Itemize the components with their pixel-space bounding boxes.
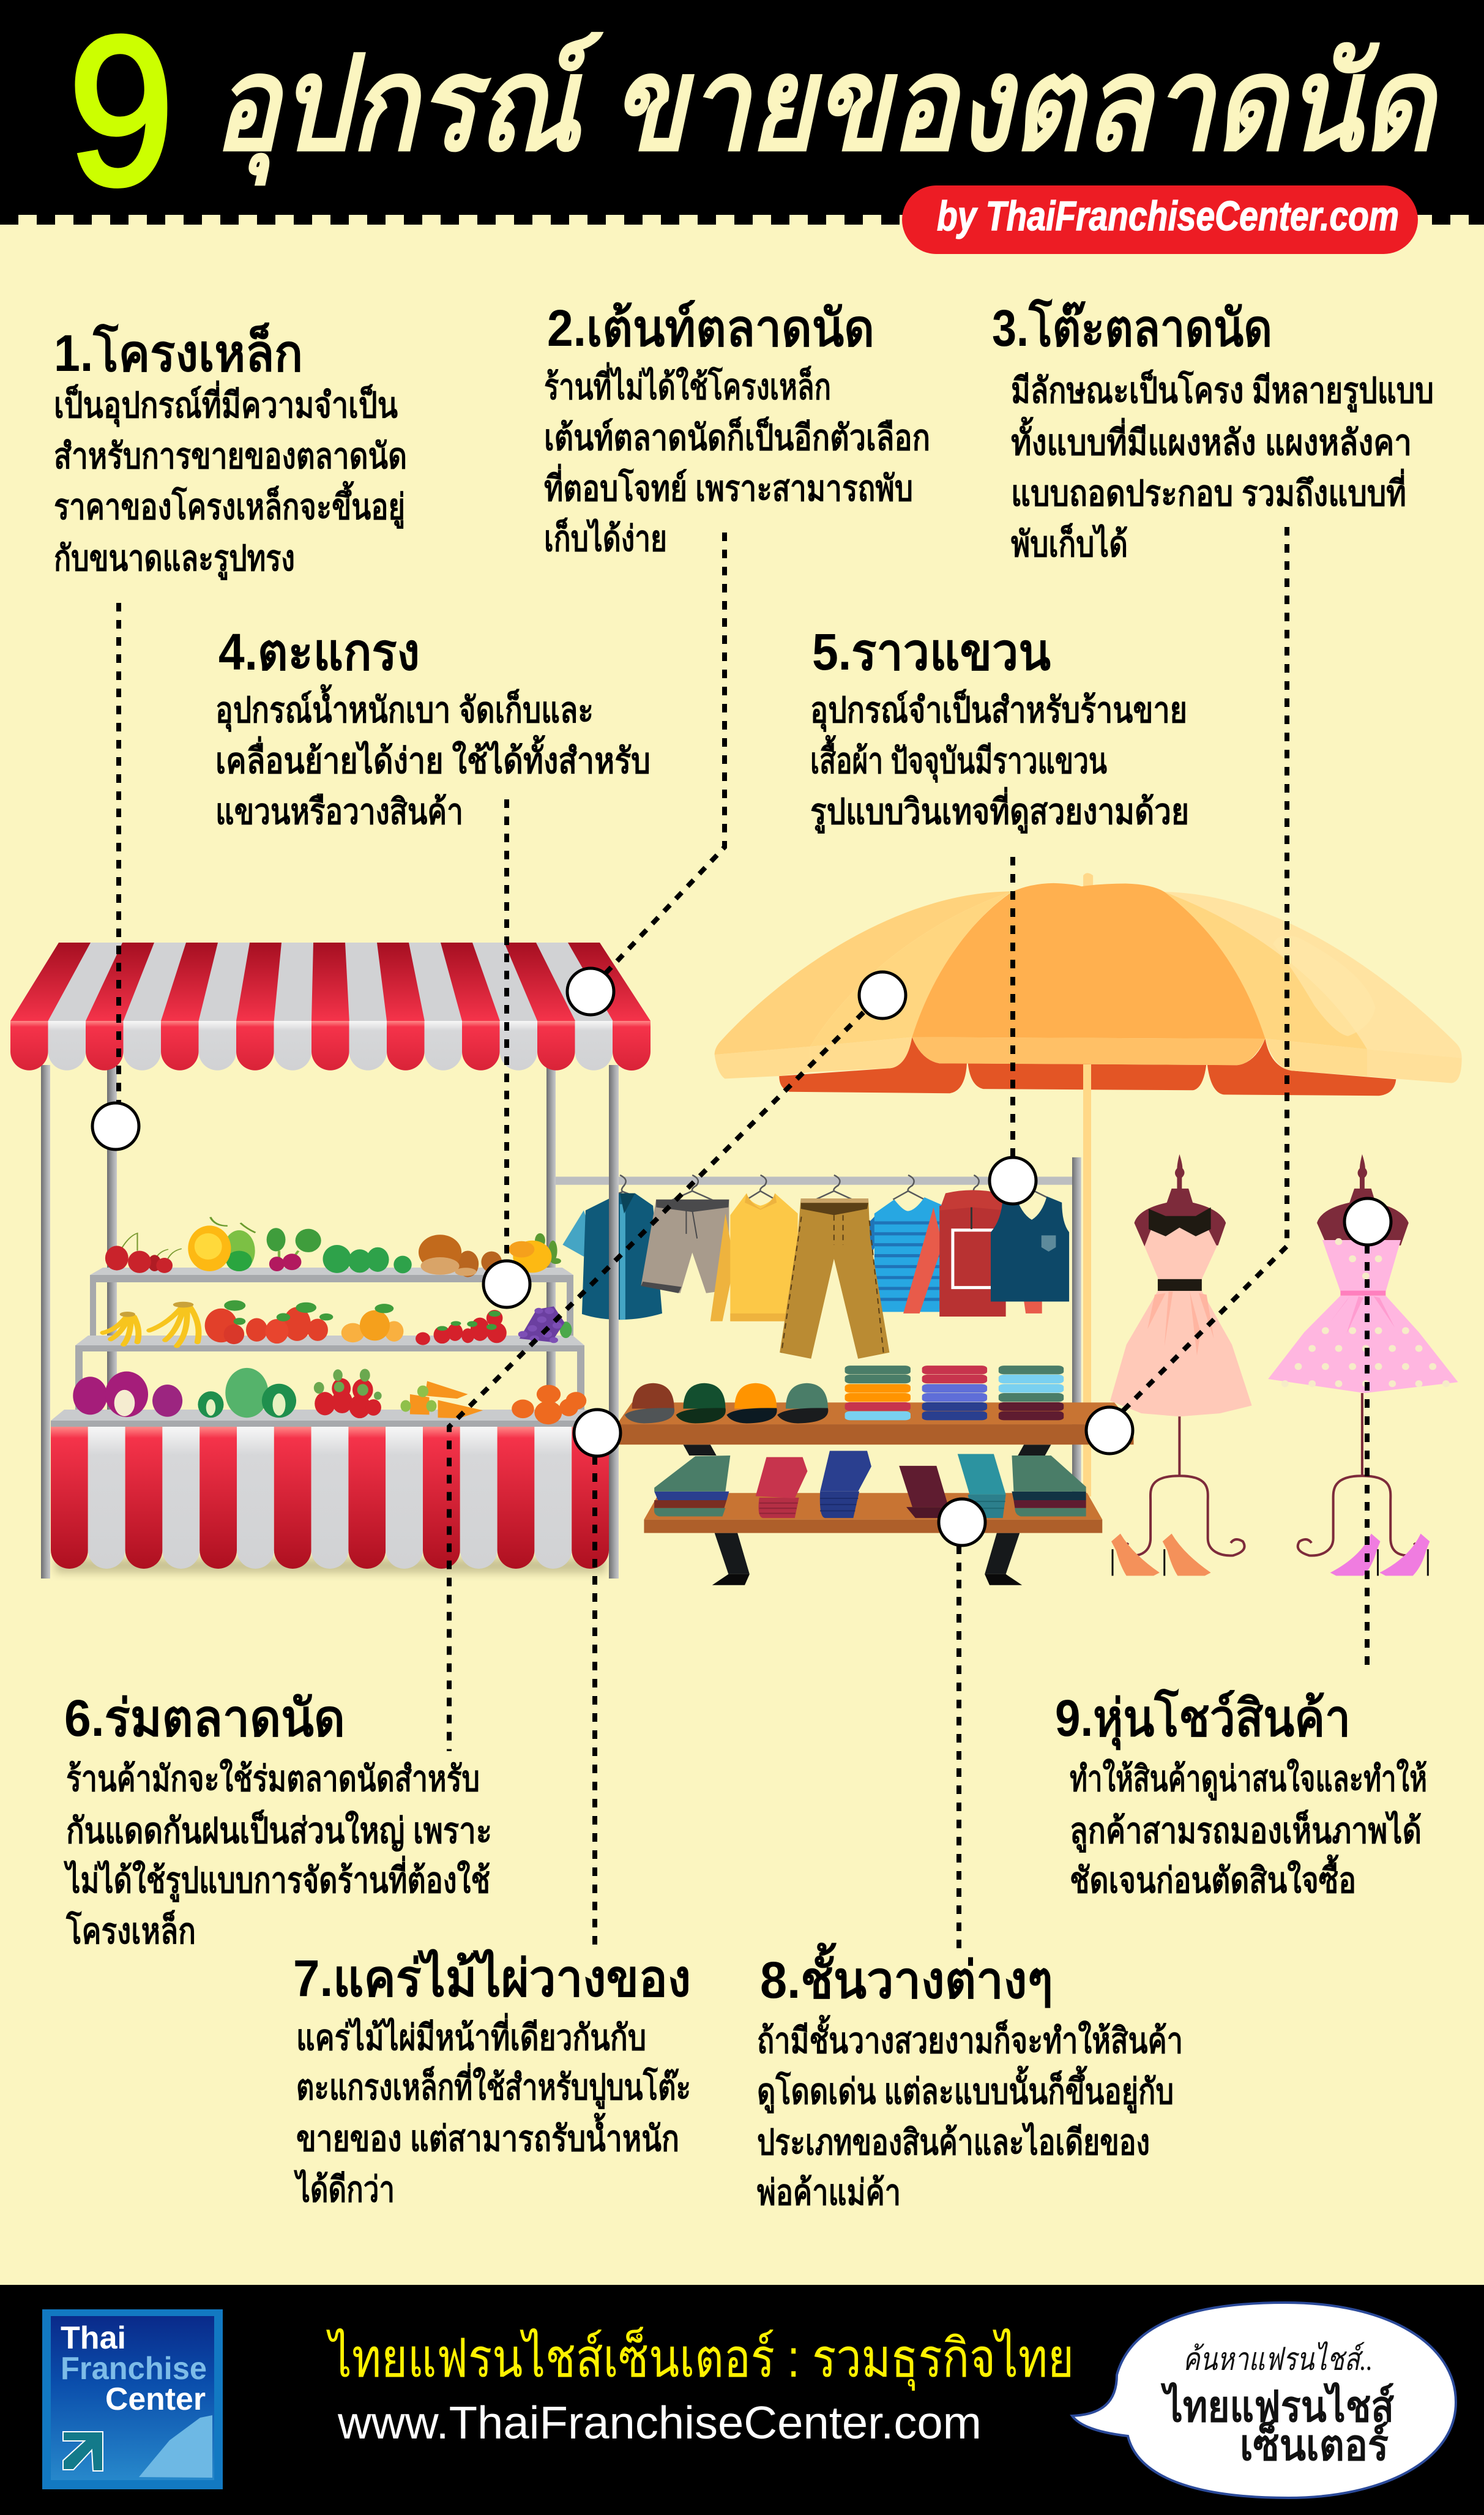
body 7: ตะแกรงเหล็กที่ใช้สำหรับปูบนโต๊ะ	[296, 2062, 691, 2109]
heading 2: 2.เต้นท์ตลาดนัด	[547, 299, 874, 357]
folded stacks on lower table	[654, 1451, 1086, 1518]
body 7	[293, 2012, 691, 2210]
speech bubble	[1072, 2303, 1456, 2498]
shelf bottom	[51, 1410, 609, 1427]
body 4: เคลื่อนย้ายได้ง่าย ใช้ได้ทั้งสำหรับ	[215, 735, 651, 781]
peach mannequin	[1110, 1154, 1252, 1555]
body 3: แบบถอดประกอบ รวมถึงแบบที่	[1011, 468, 1406, 514]
umbrella pole	[1083, 1064, 1091, 1497]
heading 8: 8.ชั้นวางต่างๆ	[760, 1942, 1053, 2009]
orange tomatoes	[512, 1385, 586, 1424]
text block 7	[293, 1949, 691, 2210]
body 2: เก็บได้ง่าย	[544, 517, 667, 559]
body 7: ได้ดีกว่า	[293, 2169, 395, 2210]
banana crowns	[120, 1302, 193, 1317]
body 1	[54, 380, 407, 580]
heading 3: 3.โต๊ะตลาดนัด	[992, 299, 1272, 357]
body 8	[757, 2015, 1183, 2213]
marker circles	[92, 968, 1391, 1545]
speech bubble: เซ็นเตอร์	[1240, 2419, 1389, 2469]
body 2: เต้นท์ตลาดนัดก็เป็นอีกตัวเลือก	[544, 416, 930, 458]
hanger hooks	[611, 1175, 1048, 1203]
body 9: ชัดเจนก่อนตัดสินใจซื้อ	[1070, 1855, 1356, 1900]
awning roof	[10, 943, 651, 1021]
body 3: ทั้งแบบที่มีแผงหลัง แผงหลังคา	[1011, 417, 1412, 463]
body 8: พ่อค้าแม่ค้า	[757, 2173, 901, 2213]
body 1: กับขนาดและรูปทรง	[54, 539, 295, 580]
body 6: ร้านค้ามักจะใช้ร่มตลาดนัดสำหรับ	[66, 1758, 480, 1799]
body 2: ร้านที่ไม่ได้ใช้โครงเหล็ก	[544, 362, 831, 407]
red cabbages	[73, 1372, 182, 1417]
produce	[73, 1217, 586, 1424]
body 6: กันแดดกันฝนเป็นส่วนใหญ่ เพราะ	[66, 1809, 492, 1852]
text block 8	[757, 1942, 1183, 2213]
folded stacks on upper table	[845, 1366, 1064, 1420]
body 4: อุปกรณ์น้ำหนักเบา จัดเก็บและ	[215, 684, 594, 733]
body 7: ขายของ แต่สามารถรับน้ำหนัก	[296, 2113, 679, 2159]
heading 7: 7.แคร่ไม้ไผ่วางของ	[293, 1949, 691, 2007]
body 1: เป็นอุปกรณ์ที่มีความจำเป็น	[54, 380, 398, 428]
body 5: รูปแบบวินเทจที่ดูสวยงามด้วย	[810, 787, 1189, 834]
apples	[205, 1300, 333, 1344]
dashed leader lines	[119, 527, 1367, 1955]
melons	[188, 1217, 255, 1271]
grapes	[518, 1306, 572, 1343]
text block 4	[215, 623, 651, 832]
clothes rack and tables	[551, 1154, 1458, 1585]
footer band	[0, 2285, 1484, 2515]
body 4: แขวนหรือวางสินค้า	[215, 792, 463, 832]
awning valance	[10, 1021, 651, 1071]
body 2	[544, 362, 930, 559]
body 9: ลูกค้าสามรถมองเห็นภาพได้	[1070, 1809, 1422, 1853]
text block 1	[54, 322, 407, 580]
market stall	[10, 943, 651, 1579]
pink shoes	[1330, 1534, 1430, 1575]
stall poles	[41, 1065, 619, 1579]
body 6: ไม่ได้ใช้รูปแบบการจัดร้านที่ต้องใช้	[63, 1855, 490, 1902]
header band	[0, 0, 1484, 254]
byline pill	[902, 185, 1418, 254]
caps	[625, 1383, 828, 1424]
logo	[42, 2309, 223, 2489]
speech bubble: ไทยแฟรนไชส์	[1160, 2382, 1394, 2431]
body 7: แคร่ไม้ไผ่มีหน้าที่เดียวกันกับ	[296, 2012, 646, 2058]
body 6	[63, 1758, 492, 1951]
body 4	[215, 684, 651, 832]
heading 6: 6.ร่มตลาดนัด	[64, 1689, 345, 1747]
footer url: www.ThaiFranchiseCenter.com	[337, 2397, 982, 2448]
green cabbages	[198, 1368, 296, 1418]
green peppers	[323, 1245, 412, 1273]
mango	[509, 1233, 561, 1272]
carrots	[400, 1381, 483, 1418]
brown trousers	[780, 1198, 889, 1359]
body 8: ประเภทของสินค้าและไอเดียของ	[757, 2122, 1150, 2162]
pink mannequin	[1268, 1154, 1458, 1555]
cherries	[105, 1233, 182, 1273]
rack right pole	[1072, 1157, 1081, 1498]
shelf middle	[75, 1336, 584, 1351]
shelf top	[90, 1268, 573, 1282]
shirt	[562, 1193, 662, 1320]
text block 9	[1055, 1689, 1427, 1900]
umbrella canopy	[715, 883, 1462, 1083]
umbrella red fringe	[779, 1037, 1396, 1096]
text block 6	[63, 1689, 492, 1951]
nuts	[419, 1235, 502, 1277]
body 5: อุปกรณ์จำเป็นสำหรับร้านขาย	[810, 689, 1187, 733]
vest	[991, 1193, 1069, 1302]
strawberries	[416, 1310, 507, 1345]
body 3: พับเก็บได้	[1011, 523, 1128, 564]
heading 9: 9.หุ่นโชว์สินค้า	[1055, 1689, 1351, 1751]
persimmons	[341, 1304, 403, 1342]
text block 2	[544, 299, 930, 559]
body 2: ที่ตอบโจทย์ เพราะสามารถพับ	[544, 463, 913, 509]
text block 5	[810, 623, 1189, 834]
lower table	[644, 1493, 1102, 1585]
tomatoes	[314, 1369, 382, 1418]
body 6: โครงเหล็ก	[65, 1910, 196, 1951]
body 1: ราคาของโครงเหล็กจะขึ้นอยู่	[54, 481, 405, 529]
heading 1: 1.โครงเหล็ก	[54, 322, 303, 382]
logo: Center	[105, 2382, 206, 2417]
umbrella finial	[1083, 873, 1093, 886]
body 9	[1070, 1758, 1427, 1900]
logo: Franchise	[61, 2351, 207, 2386]
red hoodie	[903, 1190, 1042, 1317]
yellow sweater	[710, 1193, 798, 1321]
umbrella	[715, 873, 1462, 1096]
shelf supports	[75, 1282, 584, 1411]
text block 3	[992, 299, 1434, 564]
rack rail	[551, 1176, 1073, 1185]
heading 5: 5.ราวแขวน	[812, 623, 1051, 681]
orange shoes	[1111, 1534, 1211, 1575]
body 5	[810, 689, 1189, 834]
arrow icon	[63, 2432, 103, 2471]
radishes	[267, 1228, 321, 1271]
speech bubble: ค้นหาแฟรนไชส์..	[1183, 2341, 1373, 2377]
body 5: เสื้อผ้า ปัจจุบันมีราวแขวน	[810, 735, 1107, 783]
logo: Thai	[61, 2320, 126, 2356]
body 8: ถ้ามีชั้นวางสวยงามก็จะทำให้สินค้า	[757, 2015, 1183, 2061]
t-shirt	[849, 1197, 944, 1312]
shorts	[641, 1200, 729, 1293]
table skirt	[51, 1427, 609, 1569]
footer tagline: ไทยแฟรนไชส์เซ็นเตอร์ : รวมธุรกิจไทย	[326, 2326, 1074, 2391]
title number: 9	[69, 0, 174, 229]
heading 4: 4.ตะแกรง	[218, 623, 420, 681]
body 1: สำหรับการขายของตลาดนัด	[54, 436, 407, 476]
upper table	[617, 1402, 1133, 1456]
body 3	[1011, 369, 1434, 564]
bananas	[103, 1306, 199, 1346]
skirt shadow	[55, 1558, 606, 1573]
body 8: ดูโดดเด่น แต่ละแบบนั้นก็ขึ้นอยู่กับ	[757, 2066, 1174, 2113]
